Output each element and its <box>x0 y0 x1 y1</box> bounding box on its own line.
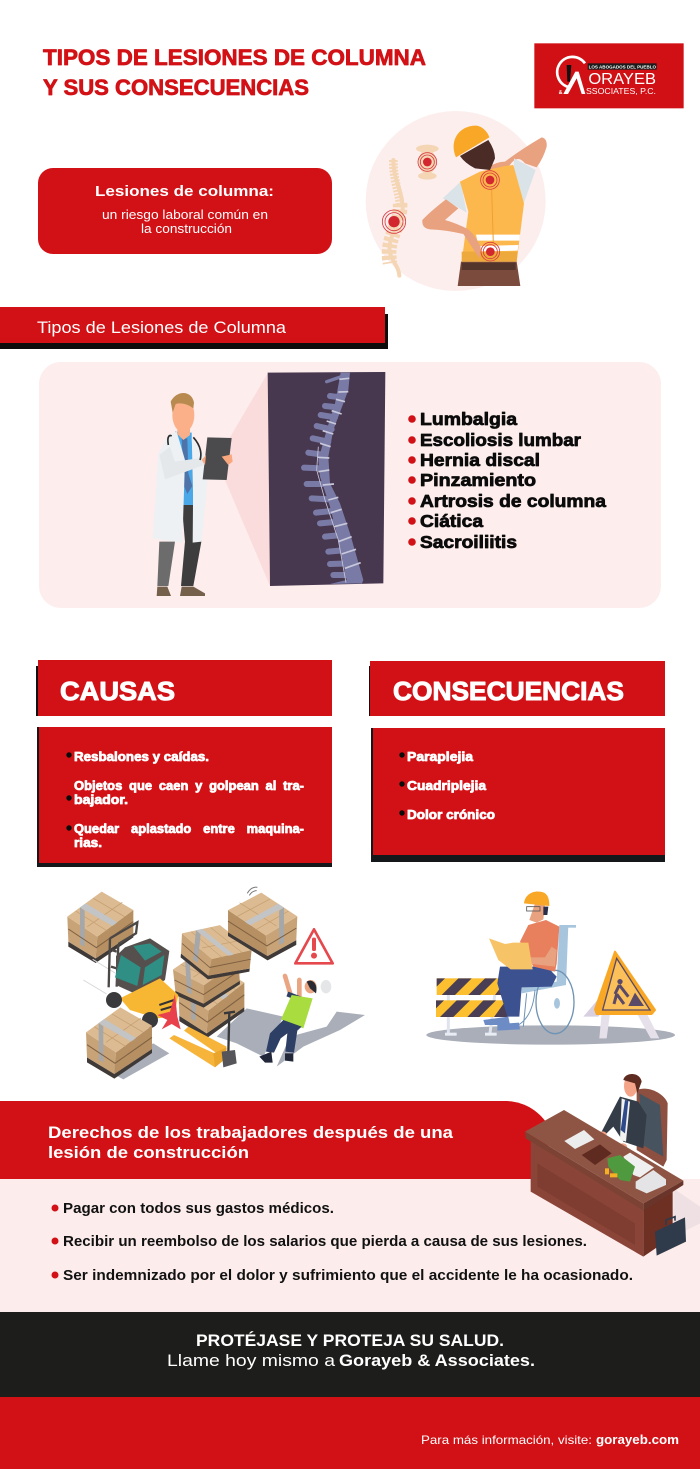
illustration: forklift accident <box>67 887 365 1079</box>
panel: causas: Resbalones y caídas. <box>74 750 209 764</box>
panel: causas <box>37 727 332 867</box>
chair <box>637 1089 668 1167</box>
logo: Gorayeb & Associates: & <box>559 90 563 96</box>
road work sign <box>583 952 659 1038</box>
list: derechos: Recibir un reembolso de los salarios que pierda a causa de sus lesiones. <box>63 1234 587 1250</box>
panel: tipos de lesiones <box>39 362 661 608</box>
callout: riesgo laboral: un riesgo laboral común en <box>102 207 268 222</box>
impact burst <box>157 994 181 1029</box>
section banner: tipos de lesiones <box>0 307 388 349</box>
list: tipos de lesiones <box>408 409 606 552</box>
panel: consecuencias <box>371 728 665 862</box>
title <box>43 45 426 100</box>
list: tipos de lesiones: Artrosis de columna <box>420 491 606 511</box>
warning sign <box>295 929 333 963</box>
panel: consecuencias: Paraplejia <box>407 750 474 764</box>
right arm <box>488 137 547 174</box>
logo: Gorayeb & Associates: ORAYEB <box>588 71 656 88</box>
illustration: lawyer at desk <box>525 1074 700 1257</box>
section: derechos de los trabajadores: Derechos de los trabajadores después de una <box>48 1124 454 1142</box>
panel: consecuencias: Dolor crónico <box>407 808 495 822</box>
list: derechos: Pagar con todos sus gastos médicos. <box>63 1201 334 1217</box>
logo: Gorayeb & Associates <box>534 43 684 108</box>
footer <box>0 1397 700 1469</box>
pain markers <box>382 153 500 261</box>
list: tipos de lesiones: Ciática <box>420 511 483 531</box>
section: derechos de los trabajadores <box>0 1101 700 1313</box>
footer: Para más información, visite: <box>421 1433 592 1447</box>
callout: riesgo laboral: la construcción <box>141 221 232 236</box>
footer: gorayeb.com <box>596 1433 679 1447</box>
heading: consecuencias: CONSECUENCIAS <box>393 678 624 706</box>
desk <box>525 1110 683 1257</box>
illustration: worker with back pain <box>366 111 547 291</box>
heading: causas <box>36 660 332 716</box>
list: tipos de lesiones: Escoliosis lumbar <box>420 430 581 450</box>
list: derechos: Ser indemnizado por el dolor y sufrimiento que el accidente le ha ocasionado. <box>63 1268 633 1284</box>
panel: causas: rias. <box>74 836 102 850</box>
callout: riesgo laboral <box>38 168 332 254</box>
logo: Gorayeb & Associates: LOS ABOGADOS DEL PUEBLO <box>589 64 656 70</box>
head <box>460 140 495 170</box>
call to action band <box>0 1312 700 1397</box>
illustration: worker in wheelchair <box>426 892 675 1045</box>
doctor and x-ray illustration <box>153 372 385 596</box>
call to action band: Gorayeb & Associates. <box>339 1352 535 1370</box>
list: tipos de lesiones: Pinzamiento <box>420 470 536 490</box>
worker <box>483 892 559 1031</box>
pants <box>458 262 520 286</box>
sleeves <box>443 182 467 213</box>
list: derechos <box>52 1201 633 1284</box>
title: Y SUS CONSECUENCIAS <box>43 75 309 100</box>
briefcase <box>655 1217 686 1256</box>
panel: causas: Objetos que caen y golpean al tra- <box>74 779 304 793</box>
wheelchair <box>518 925 576 1034</box>
vest <box>460 165 524 262</box>
call to action band: PROTÉJASE Y PROTEJA SU SALUD. <box>196 1331 504 1350</box>
spine <box>389 160 403 276</box>
forklift <box>83 922 178 1028</box>
section: derechos de los trabajadores: lesión de construcción <box>48 1144 249 1162</box>
barricade <box>436 978 508 1036</box>
vertebra <box>416 145 439 180</box>
falling worker <box>259 976 331 1063</box>
list: tipos de lesiones: Hernia discal <box>420 450 540 470</box>
logo: Gorayeb & Associates: SSOCIATES, P.C. <box>586 86 656 96</box>
left arm <box>422 199 481 258</box>
panel: causas: bajador. <box>74 793 128 807</box>
heading: consecuencias <box>369 661 665 716</box>
title: TIPOS DE LESIONES DE COLUMNA <box>43 45 426 70</box>
callout: riesgo laboral: Lesiones de columna: <box>95 184 274 200</box>
doctor <box>153 393 233 596</box>
panel: causas: Quedar aplastado entre maquina- <box>74 822 304 836</box>
lawyer <box>598 1074 647 1150</box>
section banner: tipos de lesiones: Tipos de Lesiones de Columna <box>37 319 287 337</box>
panel: consecuencias: Cuadriplejia <box>407 779 487 793</box>
pallet jack <box>169 1012 237 1067</box>
list: tipos de lesiones: Lumbalgia <box>420 409 517 429</box>
heading: causas: CAUSAS <box>60 678 175 706</box>
call to action band: Llame hoy mismo a <box>167 1352 336 1370</box>
list: tipos de lesiones: Sacroiliitis <box>420 532 517 552</box>
